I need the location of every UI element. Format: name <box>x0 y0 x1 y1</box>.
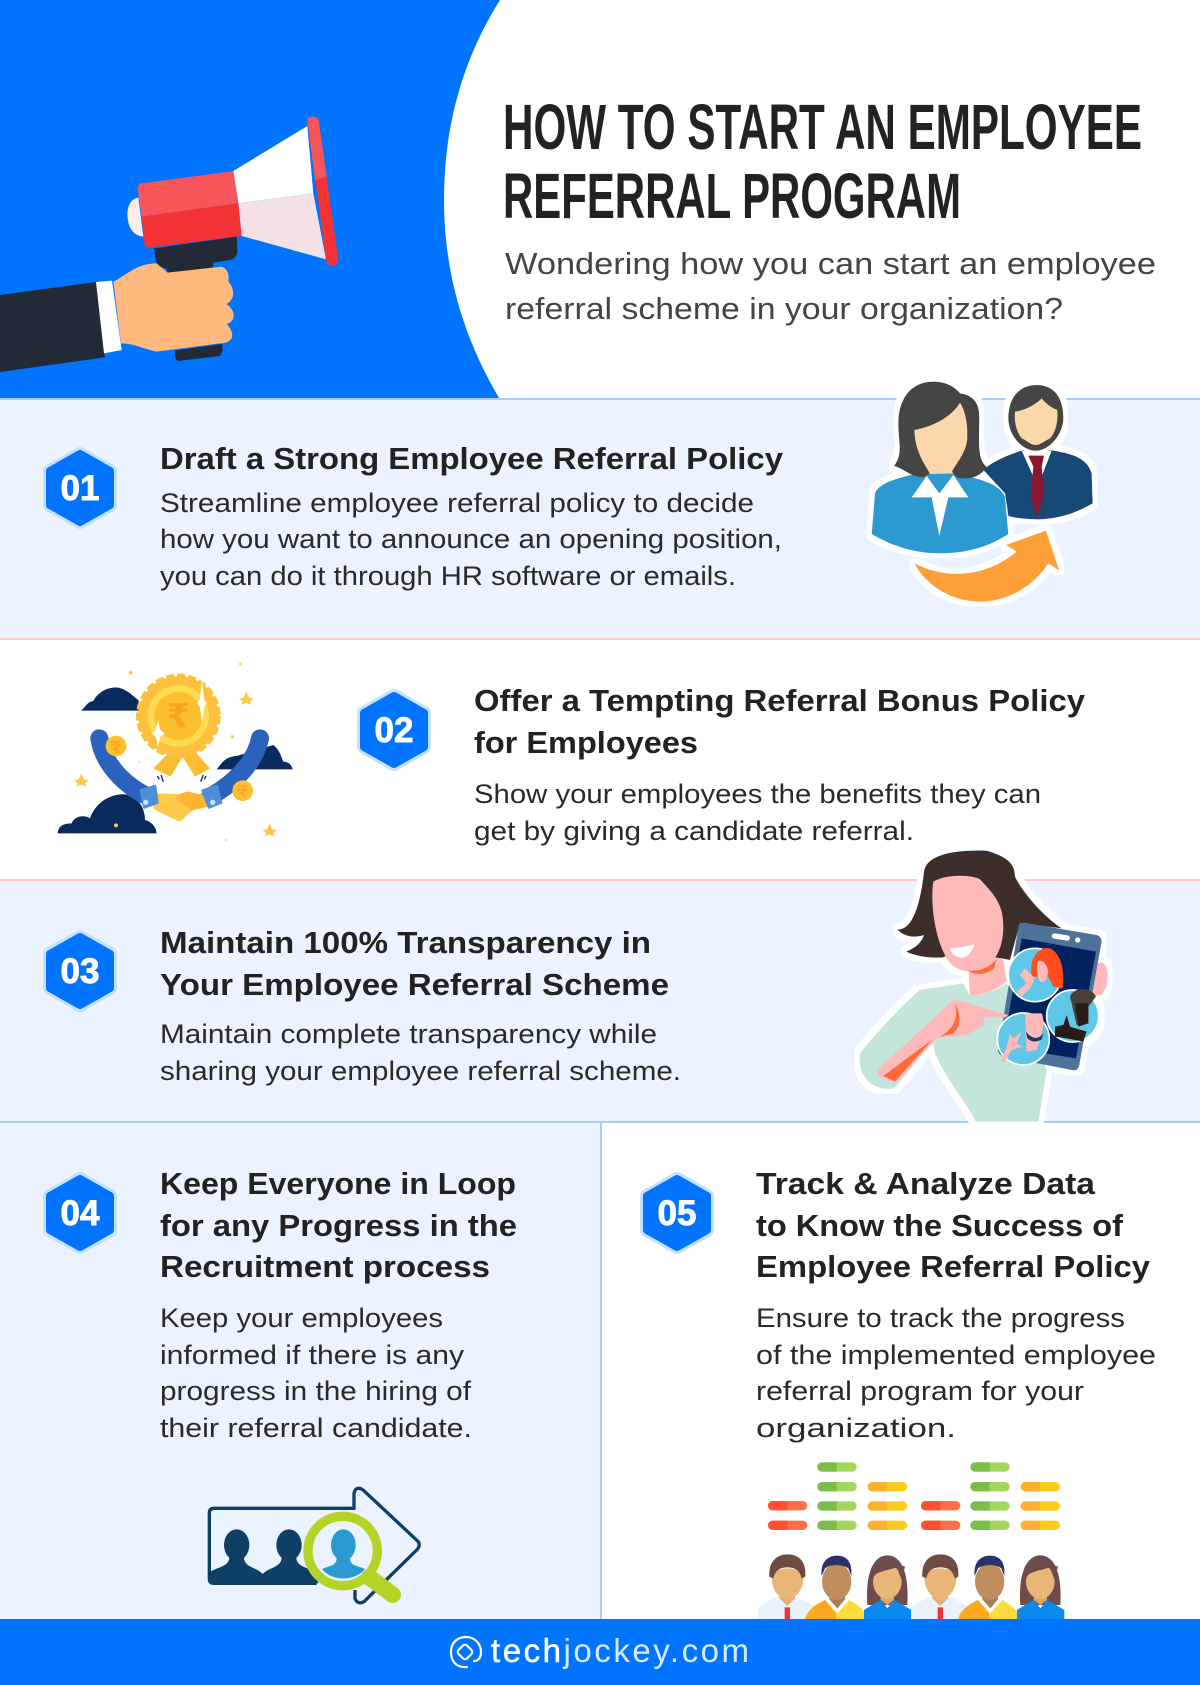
website address: techjockey.com <box>491 1632 749 1669</box>
title: REFERRAL PROGRAM <box>503 160 961 232</box>
man in white shirt <box>758 1554 815 1620</box>
badge 03 <box>50 937 110 1005</box>
badge 04 <box>50 1179 110 1247</box>
heading 5: Employee Referral Policy <box>756 1249 1151 1284</box>
badge 01: 01 <box>61 469 99 508</box>
badge 04: 04 <box>61 1194 100 1233</box>
people row <box>758 1554 1064 1620</box>
heading 5 <box>756 1166 1151 1284</box>
heading 2 <box>474 683 1086 760</box>
subtitle <box>505 246 1156 326</box>
man in yellow shirt <box>805 1556 868 1620</box>
panel: step 3 <box>0 851 1200 1123</box>
woman in blue shirt (repeat) <box>1017 1555 1064 1620</box>
text: step 4 body: progress in the hiring of <box>160 1376 472 1406</box>
icon: candidate search arrow with magnifier <box>209 1488 419 1603</box>
badge 02: 02 <box>375 711 413 750</box>
panel: step 1 <box>0 382 1200 640</box>
text: step 2 body <box>474 779 1041 846</box>
text: step 5 body: of the implemented employee <box>756 1340 1156 1370</box>
text: step 4 body: informed if there is any <box>160 1340 465 1370</box>
heading 2: for Employees <box>474 725 698 760</box>
text: step 5 body: Ensure to track the progress <box>756 1303 1125 1333</box>
text: step 5 body: organization. <box>756 1413 956 1443</box>
man in white shirt (repeat) <box>911 1554 968 1620</box>
heading 3: Maintain 100% Transparency in <box>160 925 651 960</box>
badge 05 <box>647 1179 707 1247</box>
text: step 1 body <box>160 488 782 591</box>
heading 1: Draft a Strong Employee Referral Policy <box>160 441 784 476</box>
text: step 1 body: you can do it through HR software or emails. <box>160 561 736 591</box>
heading 3 <box>160 925 669 1002</box>
icon: woman pointing at phone <box>860 851 1108 1122</box>
heading 2: Offer a Tempting Referral Bonus Policy <box>474 683 1086 718</box>
icon: techjockey logo <box>451 1637 481 1667</box>
heading 4: Keep Everyone in Loop <box>160 1166 516 1201</box>
text: step 4 body: Keep your employees <box>160 1303 443 1333</box>
text: step 3 body <box>160 1019 681 1086</box>
panel: step 4 <box>0 1123 602 1619</box>
text: step 5 body <box>756 1303 1156 1443</box>
man in yellow shirt (repeat) <box>958 1556 1021 1620</box>
footer <box>0 1619 1200 1685</box>
badge 05: 05 <box>658 1194 696 1233</box>
text: step 3 body: sharing your employee referral scheme. <box>160 1056 681 1086</box>
badge 02 <box>364 696 424 764</box>
text: step 4 body <box>160 1303 472 1443</box>
heading 4: Recruitment process <box>160 1249 490 1284</box>
text: step 2 body: Show your employees the benefits they can <box>474 779 1041 809</box>
text: step 1 body: Streamline employee referral policy to decide <box>160 488 754 518</box>
heading 5: to Know the Success of <box>756 1208 1124 1243</box>
text: step 1 body: how you want to announce an opening position, <box>160 524 782 554</box>
score bars <box>768 1462 1060 1530</box>
icon: woman and man with referral arrow <box>872 382 1093 602</box>
title <box>503 91 1142 232</box>
heading 4 <box>160 1166 517 1284</box>
subtitle: referral scheme in your organization? <box>505 291 1063 326</box>
text: step 2 body: get by giving a candidate referral. <box>474 816 914 846</box>
icon: reward medal and handshake: ₹ <box>167 696 190 735</box>
heading 5: Track & Analyze Data <box>756 1166 1096 1201</box>
text: step 4 body: their referral candidate. <box>160 1413 472 1443</box>
heading 3: Your Employee Referral Scheme <box>160 967 669 1002</box>
chart: team score bars and people <box>758 1462 1064 1620</box>
heading 4: for any Progress in the <box>160 1208 517 1243</box>
text: step 5 body: referral program for your <box>756 1376 1084 1406</box>
header panel <box>0 0 1200 398</box>
panel: step 5 <box>602 1123 1200 1620</box>
badge 01 <box>50 454 110 522</box>
panel: step 2 <box>0 640 1200 881</box>
text: step 3 body: Maintain complete transparency while <box>160 1019 657 1049</box>
icon: reward medal and handshake <box>58 663 293 841</box>
subtitle: Wondering how you can start an employee <box>505 246 1156 281</box>
woman in blue shirt <box>864 1555 911 1620</box>
icon: hand holding megaphone <box>0 117 338 372</box>
badge 03: 03 <box>61 952 99 991</box>
